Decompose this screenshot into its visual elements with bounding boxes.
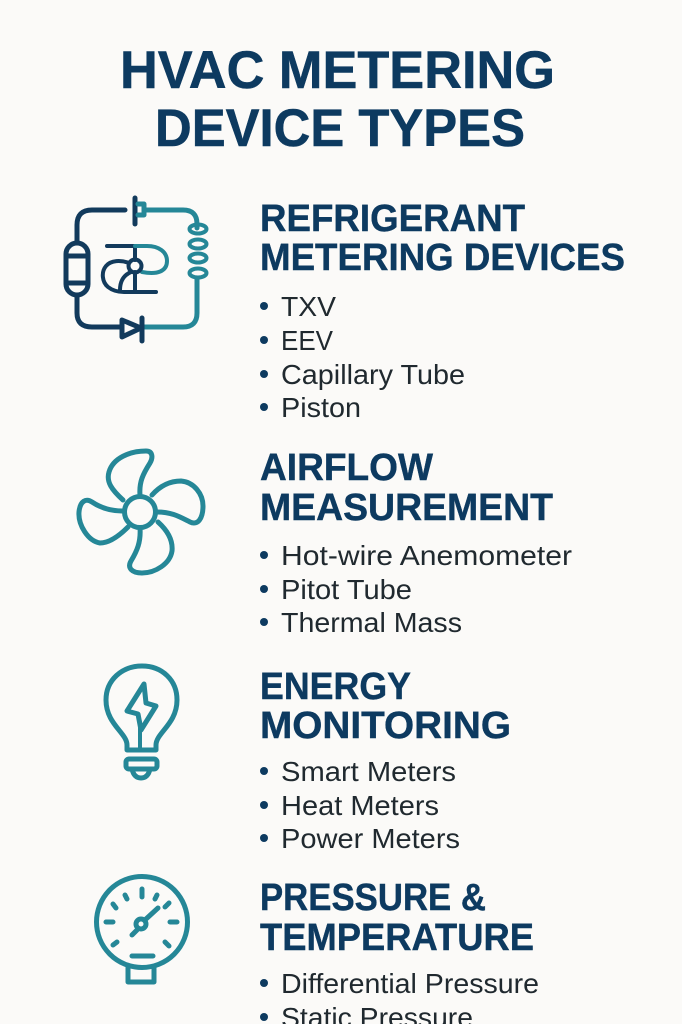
bullet list: Heat Meters bbox=[281, 790, 439, 821]
icon: fan bbox=[79, 451, 203, 573]
heading: MEASUREMENT bbox=[260, 487, 553, 529]
title bbox=[120, 41, 555, 158]
heading bbox=[260, 877, 534, 959]
heading: AIRFLOW bbox=[260, 447, 433, 489]
title: HVAC METERING bbox=[120, 41, 555, 100]
panel: airflow measurement bbox=[79, 447, 572, 638]
bullet list: Capillary Tube bbox=[281, 359, 465, 390]
bullet list: EEV bbox=[281, 325, 333, 356]
heading: REFRIGERANT bbox=[260, 198, 525, 240]
icon: light bulb with bolt bbox=[106, 666, 177, 778]
heading bbox=[260, 198, 625, 279]
bullet list: TXV bbox=[281, 291, 336, 322]
bullet list: Thermal Mass bbox=[281, 607, 462, 638]
heading: MONITORING bbox=[260, 705, 511, 747]
bullet list: Smart Meters bbox=[281, 756, 456, 787]
icon: refrigerant circuit bbox=[66, 198, 206, 341]
bullet list: Differential Pressure bbox=[281, 968, 539, 999]
title: DEVICE TYPES bbox=[155, 99, 525, 158]
panel: pressure and temperature bbox=[96, 876, 539, 1024]
bullet list: Power Meters bbox=[281, 823, 460, 854]
heading: TEMPERATURE bbox=[260, 917, 534, 959]
heading: METERING DEVICES bbox=[260, 237, 625, 279]
panel: refrigerant metering devices bbox=[66, 198, 625, 423]
bullet list: Hot-wire Anemometer bbox=[281, 540, 572, 571]
bullet list bbox=[260, 756, 460, 854]
bullet list: Pitot Tube bbox=[281, 574, 412, 605]
icon: pressure gauge bbox=[96, 876, 188, 982]
bullet list: Piston bbox=[281, 392, 361, 423]
bullet list bbox=[260, 968, 539, 1024]
heading: PRESSURE & bbox=[260, 877, 486, 919]
panel: energy monitoring bbox=[106, 666, 511, 854]
heading bbox=[260, 666, 511, 747]
heading bbox=[260, 447, 553, 529]
bullet list bbox=[260, 540, 572, 638]
bullet list bbox=[260, 291, 465, 423]
heading: ENERGY bbox=[260, 666, 411, 708]
